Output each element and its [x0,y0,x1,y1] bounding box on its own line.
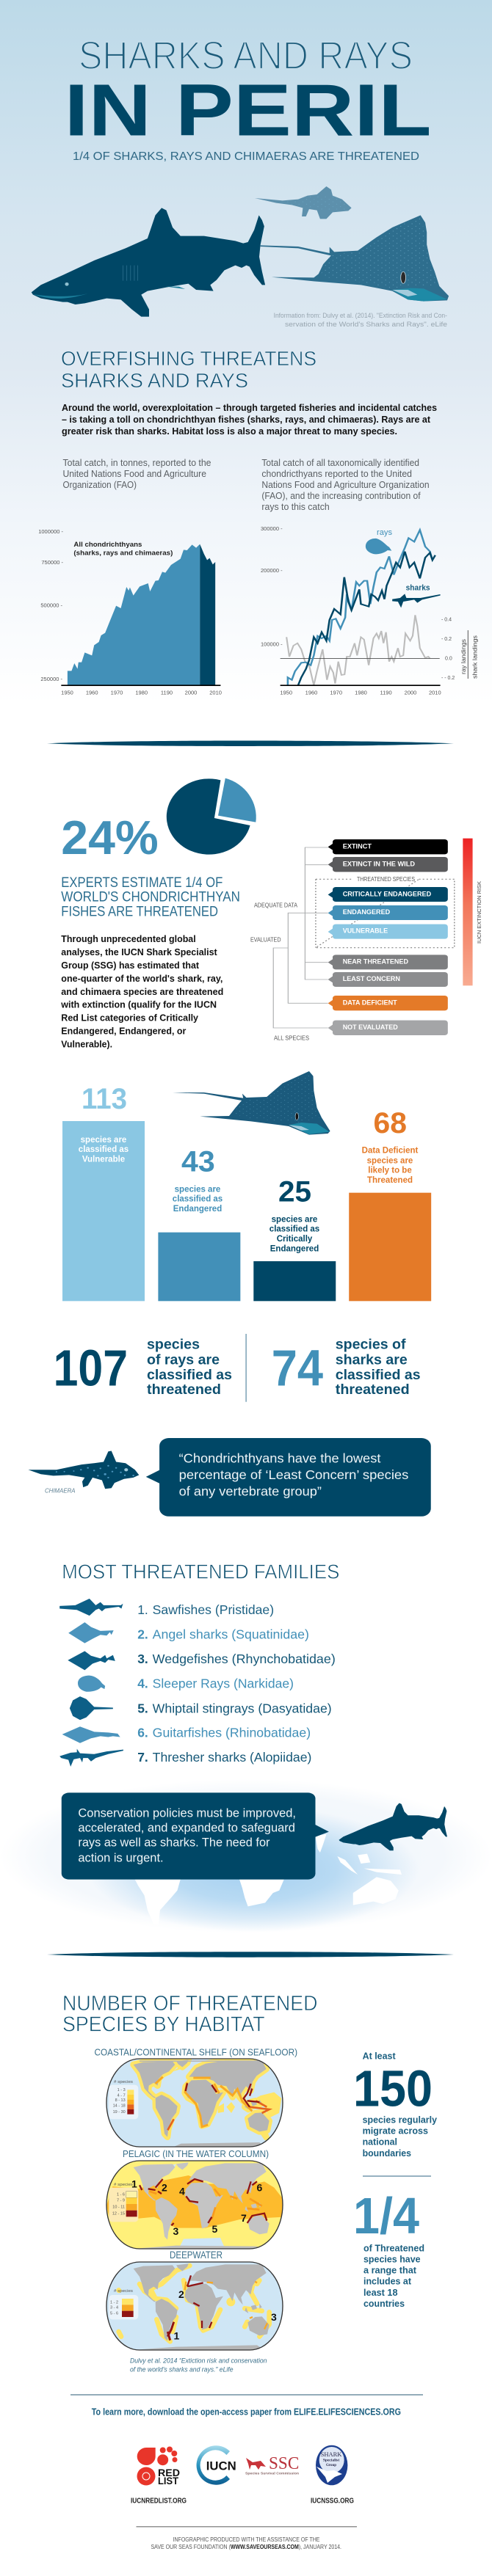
call to action: To learn more, download the open-access paper from ELIFE.ELIFESCIENCES.ORG [92,2407,401,2418]
callout: conservation policies: accelerated, and expanded to safeguard [78,1821,295,1835]
map legend: 10 - 11 [112,2205,125,2209]
stat: 107 rays: threatened [147,1382,221,1398]
families list: Sleeper Rays (Narkidae) [153,1676,294,1691]
bars [62,1121,431,1301]
logo: Species Survival Commission: Species Survival Commission [245,2471,299,2475]
line chart: rays vs sharks [261,525,479,696]
stat: 74 sharks: classified as [336,1367,421,1383]
area chart: total catch [38,528,222,696]
left chart caption [63,458,211,490]
region numbers: 2 [162,2182,167,2194]
category labels: EXTINCT IN THE WILD [343,860,415,868]
stat: one quarter range: a range that [363,2265,417,2276]
map legend: 4 - 7 [117,2093,126,2098]
heading: threatened species by habitat: SPECIES BY HABITAT [62,2013,265,2036]
x axis labels: 1980 [135,690,148,696]
stat: 107 rays: species [147,1336,200,1352]
ratio axis title [460,630,479,679]
x axis labels: 2000 [405,690,416,696]
right chart caption: Nations Food and Agriculture Organization [261,480,430,490]
map title: COASTAL/CONTINENTAL SHELF (ON SEAFLOOR) [94,2048,297,2058]
category labels: VULNERABLE [343,927,388,935]
logo: Shark Specialist Group: Specialist [323,2458,339,2462]
title line: sharks and rays: SHARKS AND RAYS [79,34,413,78]
right chart caption [261,458,430,512]
IUCN paragraph: Vulnerable). [61,1038,112,1049]
stat: 150 migratory species: At least [363,2051,396,2062]
hero illustration: shark, ray and chimaera [32,186,449,317]
world map backdrop [0,1779,492,1933]
branch labels: THREATENED SPECIES [357,876,415,883]
risk bar label: IUCN EXTINCTION RISK [476,881,482,944]
ratio axis title: shark landings [471,635,479,679]
stat: one quarter range: includes at [363,2276,412,2287]
y axis labels: 250000 - [40,676,63,682]
map legend: 19 - 30 [113,2110,126,2115]
bar 25 critically endangered: classified as [269,1225,319,1234]
map legend: 14 - 18 [113,2104,126,2109]
map legend: 12 - 15 [112,2211,125,2216]
intro paragraph [62,403,437,437]
heading: most threatened families: MOST THREATENED FAMILIES [62,1560,339,1583]
map legend: # species [114,2080,133,2084]
x axis labels [280,690,441,696]
stat: 150 migratory species: 150 [353,2060,433,2117]
heading: overfishing threatens sharks and rays [61,347,316,392]
x axis labels: 1980 [355,690,367,696]
region numbers: 1 [131,2178,137,2190]
heading: threatened species by habitat: NUMBER OF THREATENED [62,1992,317,2015]
logo: Species Survival Commission: SSC [269,2454,299,2473]
x axis labels: 1190 [161,690,173,696]
title block [65,34,432,163]
icon: hero eagle ray [261,215,449,302]
bar 68 data deficient [362,1107,419,1185]
subtitle: 1/4 OF SHARKS, RAYS AND CHIMAERAS ARE THREATENED [73,150,419,163]
map panel: coastal shelf [94,2048,297,2147]
stat: 150 migratory species [353,2051,438,2159]
left y axis labels: 300000 - [261,525,283,532]
icon: wedgefish [68,1651,115,1670]
map title: PELAGIC (IN THE WATER COLUMN) [123,2149,269,2159]
x axis labels: 1950 [61,690,73,696]
callout: least concern quote [146,1438,431,1517]
logo: Shark Specialist Group: SHARK [321,2451,342,2458]
region numbers [131,2178,263,2237]
x axis labels: 1950 [280,690,292,696]
IUCN paragraph [60,933,223,1049]
bar 68 data deficient: species are [367,1156,413,1165]
region numbers: 3 [271,2311,277,2323]
logo: IUCN Red List: LIST [158,2475,178,2486]
logo: Species Survival Commission [245,2454,299,2475]
pie chart: 24 percent threatened [167,778,256,855]
map legend: # species [114,2183,133,2187]
family icons [59,1599,123,1767]
icon: ray [366,539,391,554]
map legend: 8 - 13 [115,2098,126,2103]
series label [73,541,173,558]
x axis labels: 2000 [185,690,197,696]
intro paragraph: – is taking a toll on chondrichthyan fishes (sharks, rays, and chimaeras). Rays are at [62,415,431,425]
stat: 74 sharks: threatened [336,1382,410,1398]
icon: angel shark [68,1622,114,1643]
callout: conservation policies: rays as well as sharks. The need for [78,1836,270,1850]
ratio axis title: ray landings [460,639,467,674]
right axis ratio labels: - - 0.2 [441,676,455,681]
divider [47,741,454,746]
bar 68 data deficient: Data Deficient [362,1147,419,1156]
category labels: EXTINCT [343,843,372,851]
map legend [112,2183,133,2216]
page background gradient [0,0,492,704]
stat: one quarter range: 1/4 [353,2187,419,2244]
bar 113 vulnerable [79,1083,129,1164]
stat: 150 migratory species: migrate across [363,2126,428,2137]
icon: whiptail stingray [70,1696,113,1720]
logo: Shark Specialist Group [311,2445,354,2506]
icon: thresher shark [59,1749,123,1767]
heading: overfishing threatens sharks and rays: OVERFISHING THREATENS [61,347,316,370]
map legend: 1 - 2 [110,2301,118,2305]
IUCN paragraph: with extinction (qualify for the IUCN [60,999,217,1010]
families list: Whiptail stingrays (Dasyatidae) [153,1701,332,1715]
region numbers: 7 [241,2212,247,2224]
bar 25 critically endangered: species are [272,1215,317,1224]
map citation: Dulvy et al. 2014 “Extiction risk and conservation [130,2357,267,2365]
stat: one quarter range: least 18 [363,2287,398,2298]
map legend [113,2080,133,2115]
stat: 150 migratory species: species regularly [363,2114,438,2125]
icon: sawfish [59,1599,123,1616]
x axis labels [61,690,222,696]
heading: experts estimate: EXPERTS ESTIMATE 1/4 OF [61,875,223,891]
stat: 107 rays: classified as [147,1367,232,1383]
right axis ratio labels: - 0.2 [441,637,452,642]
callout: least concern quote: of any vertebrate group” [179,1484,322,1499]
x axis labels: 2010 [209,690,222,696]
bar 25 critically endangered: Endangered [270,1244,319,1253]
bar 68 data deficient: Threatened [367,1176,413,1185]
bar 113 vulnerable: species are [81,1136,126,1145]
icon: chimaera [28,1451,139,1495]
bar 43 endangered: 43 [181,1146,215,1178]
region numbers: 6 [257,2182,263,2194]
bar 43 endangered: classified as [173,1195,223,1204]
logo: IUCN Red List [131,2446,187,2506]
families list: 1. [137,1602,148,1617]
IUCN paragraph: analyses, the IUCN Shark Specialist [61,946,217,957]
right axis ratio labels: 0.0 [445,656,452,661]
x axis labels: 1960 [305,690,317,696]
y axis labels: 1000000 - [38,528,64,535]
stat: one quarter range: countries [363,2298,405,2309]
bar 68 data deficient: likely to be [368,1167,412,1175]
families list: Sawfishes (Pristidae) [153,1602,274,1617]
label: sharks: sharks [406,583,430,592]
heading: experts estimate [61,875,240,919]
bar 25 critically endangered: 25 [278,1175,311,1208]
x axis labels: 1970 [111,690,123,696]
right chart caption: Total catch of all taxonomically identified [261,458,419,468]
divider [47,1952,454,1957]
title line: in peril: IN PERIL [65,69,432,151]
map citation [130,2357,267,2374]
bar 43 endangered [173,1146,223,1214]
category labels: ENDANGERED [343,908,390,916]
stat: 74 sharks: species of [336,1336,406,1352]
map panel: pelagic [106,2149,283,2249]
world map [106,2262,283,2350]
category labels: DATA DEFICIENT [343,999,397,1007]
region numbers: 5 [211,2223,217,2235]
y axis labels: 500000 - [40,602,63,609]
right chart caption: rays to this catch [261,502,330,512]
bar 68 data deficient: 68 [373,1107,407,1139]
stat: 150 migratory species: boundaries [363,2148,411,2159]
families list: 7. [137,1750,148,1765]
x axis labels: 1190 [380,690,392,696]
series label: (sharks, rays and chimaeras) [73,550,173,558]
stat: 107 rays: 107 [54,1339,128,1396]
IUCN paragraph: Through unprecedented global [61,933,196,944]
IUCN paragraph: and chimaera species are threatened [61,986,223,997]
stat: 150 migratory species: national [363,2137,397,2148]
category labels [343,843,431,1032]
right chart caption: (FAO), and the increasing contribution of [261,491,421,501]
citation note: servation of the World's Sharks and Rays". eLife [285,321,447,328]
branch labels: EVALUATED [250,936,281,943]
stat: 107 rays: of rays are [147,1351,220,1368]
map legend: 1 - 3 [117,2088,126,2092]
families list: Wedgefishes (Rhynchobatidae) [153,1652,336,1666]
footer credit: INFOGRAPHIC PRODUCED WITH THE ASSISTANCE OF THE [173,2536,320,2543]
category labels: NEAR THREATENED [343,957,408,966]
families list: 3. [137,1652,148,1666]
families list: 6. [137,1726,148,1740]
icon: hero shark [32,208,265,317]
series label: All chondrichthyans [73,541,142,549]
map legend: # species [114,2289,133,2294]
stat: one quarter range [353,2187,424,2309]
right axis ratio labels: - 0.4 [441,618,452,623]
stat: 74 sharks [272,1336,421,1398]
left chart caption: United Nations Food and Agriculture [63,469,206,479]
left y axis labels [261,525,283,648]
heading: threatened species by habitat [62,1992,317,2036]
label: rays: rays [377,528,393,537]
intro paragraph: Around the world, overexploitation – through targeted fisheries and incidental catches [62,403,437,413]
chart lines [281,530,441,686]
map legend [110,2289,133,2316]
heading: experts estimate: FISHES ARE THREATENED [61,904,218,919]
icon: hero chimaera [255,186,352,219]
logo: Shark Specialist Group: IUCNSSG.ORG [311,2497,354,2506]
logo: IUCN Red List: RED [158,2467,180,2478]
heading: overfishing threatens sharks and rays: SHARKS AND RAYS [61,369,248,392]
icon: shark [392,594,441,607]
branch labels: ADEQUATE DATA [254,902,298,909]
intro paragraph: greater risk than sharks. Habitat loss is also a major threat to many species. [62,426,397,437]
logo: IUCN [197,2445,236,2485]
chart areas [61,544,220,686]
big stat: 24 percent: 24% [61,811,159,864]
stat: 107 rays [54,1336,232,1398]
IUCN paragraph: Red List categories of Critically [61,1012,199,1023]
IUCN paragraph: Group (SSG) has estimated that [61,960,200,971]
y axis labels [38,528,64,682]
connector lines and category boxes [273,839,473,1035]
stat: 74 sharks: sharks are [336,1351,408,1368]
map panel: deepwater [106,2250,283,2350]
map legend: 7 - 9 [117,2199,125,2203]
heading: experts estimate: WORLD'S CHONDRICHTHYAN [61,890,240,905]
map legend: 5 - 6 [110,2312,118,2316]
region numbers [173,2288,277,2342]
region numbers: 2 [178,2288,184,2300]
x axis labels: 1970 [330,690,342,696]
bar 113 vulnerable: Vulnerable [82,1155,125,1164]
left chart caption: Organization (FAO) [63,480,137,490]
IUCN paragraph: one-quarter of the world's shark, ray, [61,973,223,984]
branch labels [250,876,415,1041]
icon: sleeper ray [78,1676,105,1692]
icon: guitarfish [62,1726,120,1743]
families list: 5. [137,1701,148,1715]
left y axis labels: 200000 - [261,567,283,574]
families list: Thresher sharks (Alopiidae) [153,1750,311,1765]
families list [137,1602,336,1765]
citation note: Information from: Dulvy et al. (2014). "Extinction Risk and Con- [274,312,447,319]
branch labels: ALL SPECIES [274,1035,309,1041]
families list: Guitarfishes (Rhinobatidae) [153,1726,311,1740]
families list: 4. [137,1676,148,1691]
callout: least concern quote: “Chondrichthyans have the lowest [179,1451,381,1466]
map title: DEEPWATER [170,2250,223,2261]
icon: eagle ray above bars [173,1071,330,1135]
icon: shark beside callout [339,1803,447,1850]
citation note [274,312,447,328]
IUCN category diagram [250,839,482,1041]
region numbers: 3 [173,2225,179,2237]
stat: 74 sharks: 74 [272,1339,323,1396]
right axis ratio labels [441,618,455,681]
stat: one quarter range: of Threatened [363,2242,424,2253]
map legend: 3 - 4 [110,2305,118,2310]
callout: conservation policies: action is urgent. [78,1850,164,1864]
map citation: of the world’s sharks and rays.” eLife [130,2366,234,2374]
footer credit: SAVE OUR SEAS FOUNDATION (WWW.SAVEOURSEAS.COM), JANUARY 2014. [151,2544,341,2550]
y axis labels: 750000 - [41,559,64,566]
IUCN paragraph: Endangered, Endangered, or [61,1025,186,1036]
left y axis labels: 100000 - [261,641,283,648]
left chart caption: Total catch, in tonnes, reported to the [63,458,211,468]
bar 25 critically endangered: Critically [277,1235,313,1244]
bar 43 endangered: Endangered [173,1205,222,1214]
region numbers: 1 [173,2330,179,2342]
stat: one quarter range: species have [363,2253,421,2264]
bar 113 vulnerable: 113 [82,1083,127,1115]
category labels: CRITICALLY ENDANGERED [343,891,431,899]
icon: chimaera: CHIMAERA [45,1488,75,1495]
logo: Shark Specialist Group: Group [326,2464,336,2467]
callout: conservation policies [62,1792,329,1880]
x axis labels: 1960 [86,690,98,696]
right chart caption: chondricthyans reported to the United [261,469,412,479]
category labels: NOT EVALUATED [343,1024,398,1032]
families list: Angel sharks (Squatinidae) [153,1627,309,1642]
map legend: 1 - 6 [117,2193,125,2197]
families list: 2. [137,1627,148,1642]
bar 43 endangered: species are [175,1185,220,1194]
callout: conservation policies: Conservation policies must be improved, [78,1806,296,1820]
callout: least concern quote: percentage of ‘Least Concern’ species [179,1467,409,1482]
logo: IUCN Red List: IUCNREDLIST.ORG [131,2497,187,2506]
bar 113 vulnerable: classified as [79,1145,129,1154]
bar 25 critically endangered [269,1175,319,1253]
region numbers: 4 [179,2186,185,2197]
logo: IUCN: IUCN [206,2459,236,2473]
footer credit [151,2536,341,2550]
world map [106,2059,283,2147]
bar chart: threatened counts [62,1083,431,1301]
category labels: LEAST CONCERN [343,975,400,983]
x axis labels: 2010 [429,690,441,696]
world map [106,2161,283,2249]
